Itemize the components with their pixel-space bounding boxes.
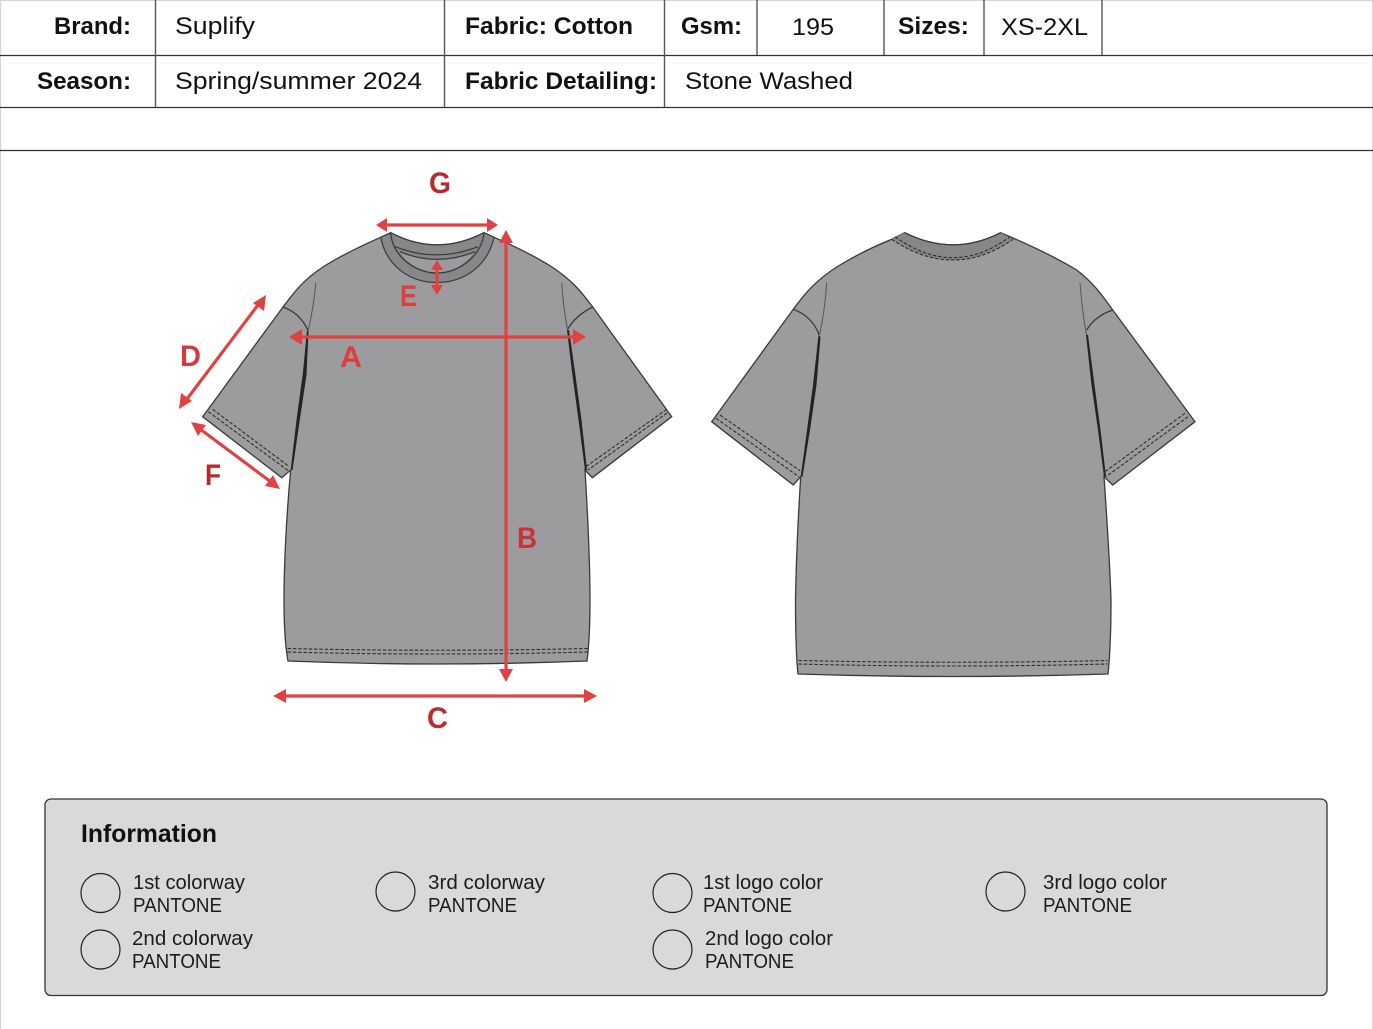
sizes label: Sizes:: [898, 13, 969, 40]
swatch: 3rd logo color: [986, 872, 1025, 911]
sizes value: XS-2XL: [1001, 14, 1088, 41]
text: 1st logo color: 1st logo color: [703, 872, 823, 894]
fabric detailing value: Stone Washed: [685, 68, 853, 95]
label G: G: [429, 167, 451, 200]
arrow D: sleeve length: [179, 295, 266, 409]
text: 1st colorway pantone: PANTONE: [133, 895, 222, 917]
text: 1st colorway: 1st colorway: [133, 872, 245, 894]
season label: Season:: [37, 68, 131, 95]
text: 2nd colorway: 2nd colorway: [132, 928, 253, 950]
brand value: Suplify: [175, 13, 255, 40]
back t-shirt: [712, 233, 1195, 676]
text: 3rd colorway: 3rd colorway: [428, 872, 545, 894]
collar: [381, 233, 494, 282]
season value: Spring/summer 2024: [175, 68, 422, 95]
arrow F: sleeve opening: [191, 422, 280, 489]
arrow A: chest width: [289, 329, 586, 345]
armholes: [283, 307, 593, 330]
arrow B: body length: [499, 230, 513, 682]
label F: F: [205, 459, 221, 492]
text: 3rd colorway pantone: PANTONE: [428, 895, 517, 917]
fabric: Fabric: Cotton: [465, 13, 633, 40]
label A: A: [340, 341, 362, 374]
gsm value: 195: [792, 14, 834, 41]
back collar band: [892, 233, 1013, 260]
cuff stitches: [208, 409, 667, 471]
text: 2nd logo color: 2nd logo color: [705, 928, 833, 950]
fabric detailing label: Fabric Detailing:: [465, 68, 657, 95]
back side folds: [820, 283, 1086, 335]
panel: information: [45, 799, 1327, 996]
arrow E: neck drop: [431, 260, 443, 295]
text: 2nd logo pantone: PANTONE: [705, 951, 794, 973]
arrow G: neck width: [376, 218, 498, 232]
swatch: 1st colorway: [81, 874, 120, 912]
label B: B: [517, 522, 537, 555]
side folds: [308, 283, 568, 332]
text: 1st logo pantone: PANTONE: [703, 895, 792, 917]
swatch: 2nd colorway: [81, 930, 120, 969]
back hem stitches: [798, 660, 1108, 666]
label E: E: [400, 280, 417, 313]
gsm label: Gsm:: [681, 13, 742, 40]
text: 2nd colorway pantone: PANTONE: [132, 951, 221, 973]
back cuff stitches: [716, 413, 1188, 477]
header table: [0, 0, 1373, 150]
hem stitches: [288, 648, 588, 654]
back armholes: [793, 309, 1113, 335]
text: 3rd logo color: 3rd logo color: [1043, 872, 1167, 894]
arrow C: hem width: [273, 689, 597, 703]
swatch: 2nd logo color: [653, 930, 692, 969]
label D: D: [180, 340, 201, 373]
swatch: 3rd colorway: [376, 872, 415, 911]
information heading: Information: [81, 820, 217, 848]
front t-shirt: [203, 233, 672, 664]
label C: C: [427, 702, 448, 735]
text: 3rd logo pantone: PANTONE: [1043, 895, 1132, 917]
brand label: Brand:: [54, 13, 131, 40]
swatch: 1st logo color: [653, 874, 692, 912]
